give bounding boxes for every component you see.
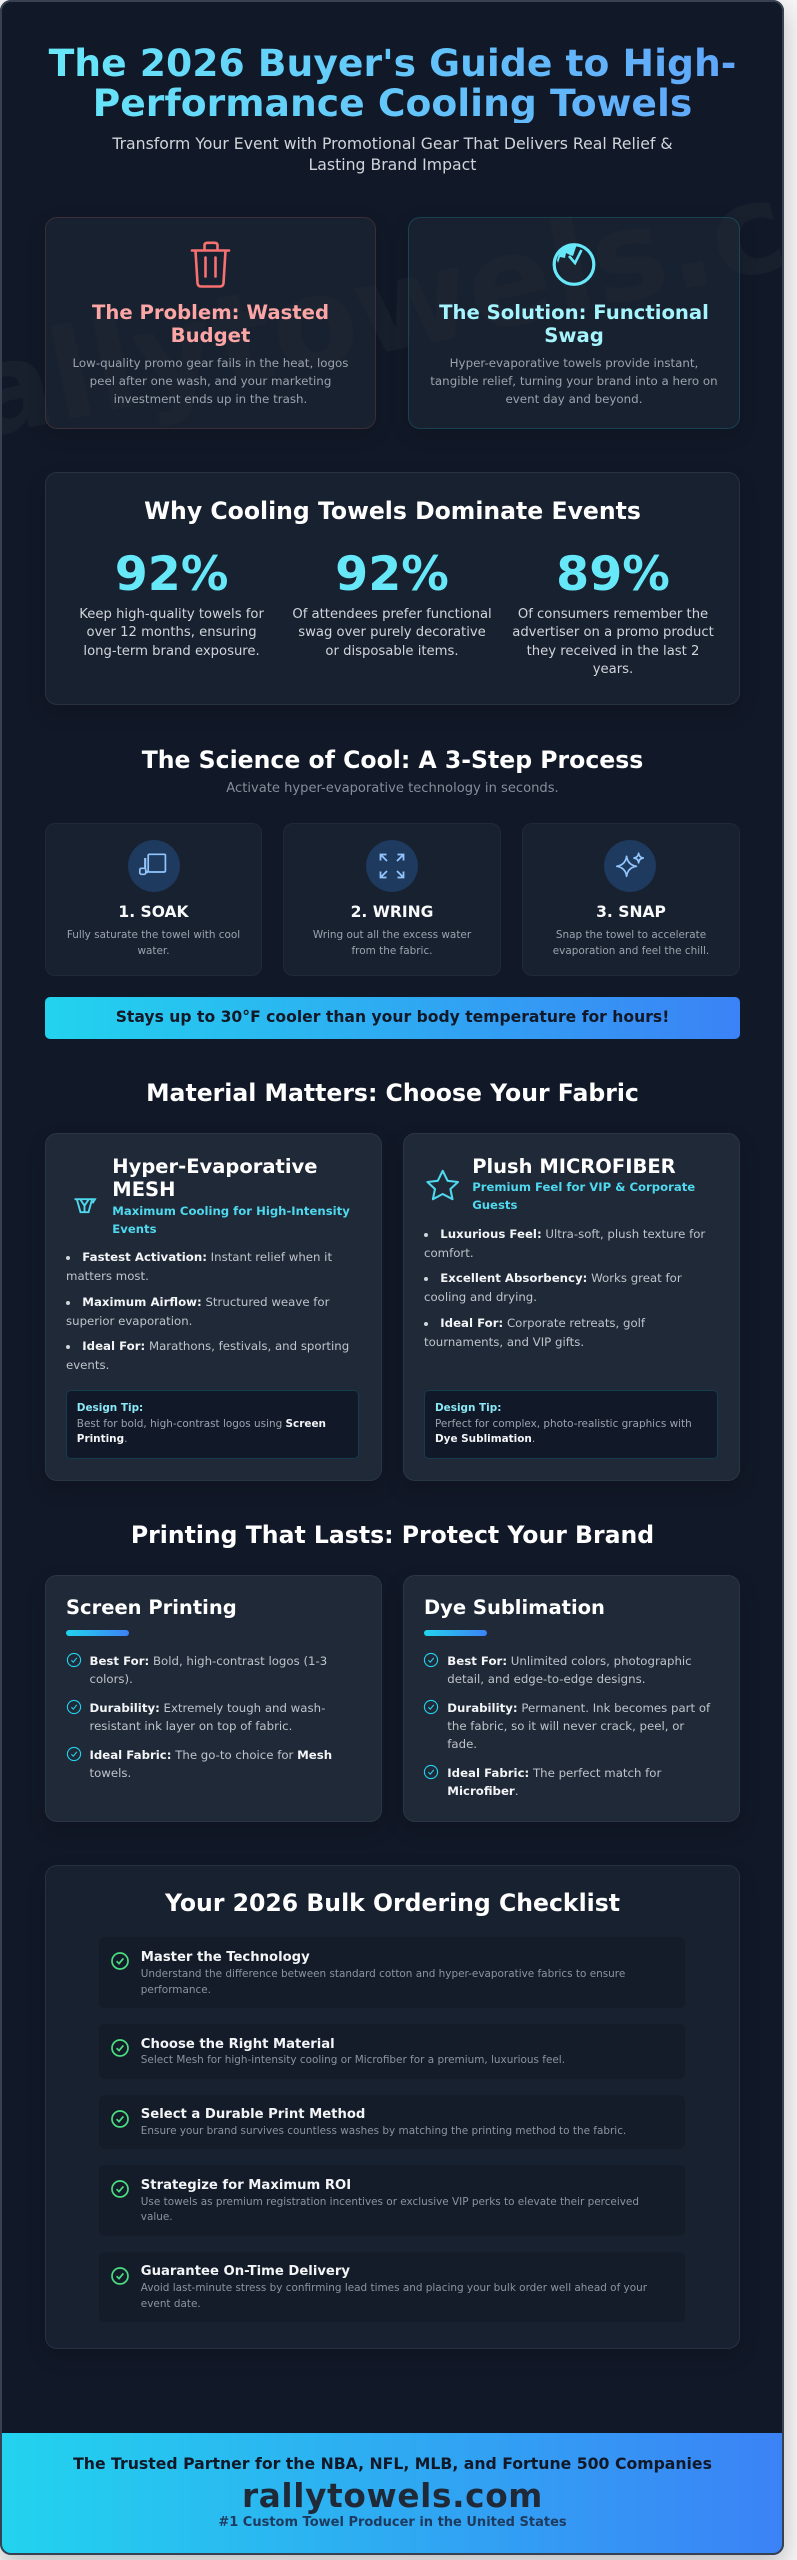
bullet: ideal for bbox=[66, 1339, 349, 1372]
step 2: wring bbox=[283, 823, 501, 976]
fabric subtitle: Guests bbox=[472, 1198, 517, 1212]
checklist item 3 bbox=[99, 2094, 685, 2149]
icon: check bbox=[111, 1952, 129, 1970]
fabric subtitle bbox=[112, 1204, 350, 1236]
heading: material matters: Material Matters: Choose Your Fabric bbox=[146, 1079, 639, 1107]
number: 89% bbox=[556, 546, 670, 602]
step title: 2. WRING bbox=[351, 903, 433, 921]
panel: mesh bbox=[45, 1133, 382, 1481]
bullet: excellent absorbency: cooling and drying. bbox=[424, 1290, 537, 1304]
item: best for: Best For: Bold, high-contrast logos (1-3 bbox=[90, 1654, 327, 1668]
bullet: ideal for: tournaments, and VIP gifts. bbox=[424, 1334, 584, 1348]
title bbox=[45, 44, 740, 123]
item: ideal fabric: towels. bbox=[90, 1766, 131, 1780]
accent bar bbox=[424, 1630, 487, 1636]
item text: Understand the difference between standard cotton and hyper-evaporative fabrics to ensure bbox=[141, 1968, 625, 1980]
item: ideal fabric: Ideal Fabric: The perfect match for bbox=[447, 1766, 661, 1780]
subtitle bbox=[112, 134, 673, 174]
heading: the solution: Swag bbox=[544, 324, 604, 347]
title: Performance Cooling Towels bbox=[93, 81, 692, 125]
stat: 89 percent remember bbox=[512, 546, 714, 677]
caption: advertiser on a promo product bbox=[512, 625, 714, 640]
icon: check bbox=[111, 2039, 129, 2057]
stat: 92 percent prefer bbox=[292, 546, 492, 659]
icon: check bbox=[111, 2180, 129, 2198]
heading: the problem bbox=[92, 301, 329, 347]
callout banner: Stays up to 30°F cooler than your body temperature for hours! bbox=[116, 1008, 669, 1026]
icon: star bbox=[426, 1170, 459, 1200]
panel: the solution bbox=[408, 217, 740, 429]
bullet: ideal for: Ideal For: Corporate retreats, golf bbox=[440, 1316, 645, 1330]
icon: mesh towel bbox=[74, 1198, 97, 1214]
fabric title: Hyper-Evaporative bbox=[112, 1155, 318, 1178]
checklist item 4 bbox=[99, 2165, 685, 2236]
caption: over 12 months, ensuring bbox=[87, 625, 257, 640]
item text bbox=[141, 2281, 647, 2312]
bullet: excellent absorbency bbox=[424, 1271, 682, 1304]
print method title: Dye Sublimation bbox=[424, 1596, 605, 1619]
item text: Ensure your brand survives countless washes by matching the printing method to the fabric. bbox=[141, 2125, 626, 2137]
callout: design tip: Printing. bbox=[77, 1433, 127, 1445]
callout: design tip: Dye Sublimation. bbox=[435, 1433, 535, 1445]
item title: Select a Durable Print Method bbox=[141, 2107, 365, 2122]
heading: science of cool: The Science of Cool: A 3-Step Process bbox=[142, 746, 643, 774]
step text bbox=[67, 929, 240, 957]
checklist item 2 bbox=[99, 2024, 685, 2079]
item title: Guarantee On-Time Delivery bbox=[141, 2264, 350, 2279]
fabric subtitle bbox=[472, 1180, 695, 1212]
item title: Choose the Right Material bbox=[141, 2037, 335, 2052]
item: best for: detail, and edge-to-edge designs. bbox=[447, 1672, 645, 1686]
heading: stats: Why Cooling Towels Dominate Events bbox=[144, 497, 641, 525]
caption: years. bbox=[593, 662, 633, 677]
item: best for: Best For: Unlimited colors, photographic bbox=[447, 1654, 692, 1668]
checklist item 5 bbox=[99, 2252, 685, 2322]
accent bar bbox=[66, 1630, 129, 1636]
item title: Master the Technology bbox=[141, 1950, 310, 1965]
callout: design tip: Design Tip: bbox=[77, 1402, 143, 1414]
bullet: ideal for: events. bbox=[66, 1358, 109, 1372]
item: ideal fabric bbox=[66, 1746, 332, 1780]
step text: evaporation and feel the chill. bbox=[553, 945, 709, 957]
panel: the problem bbox=[45, 217, 376, 429]
bullet: excellent absorbency: Excellent Absorbency: Works great for bbox=[440, 1271, 682, 1285]
bullet: fastest activation: Fastest Activation: Instant relief when it bbox=[82, 1250, 332, 1264]
icon: snap bbox=[604, 840, 656, 892]
icon: trash can bbox=[190, 242, 230, 288]
item text: value. bbox=[141, 2211, 173, 2223]
heading: the problem: Budget bbox=[171, 324, 250, 347]
icon: soak bbox=[128, 840, 180, 892]
bullet: ideal for bbox=[424, 1316, 646, 1348]
item: best for: colors). bbox=[90, 1672, 133, 1686]
caption bbox=[292, 607, 492, 659]
heading: printing that lasts: Printing That Lasts: Protect Your Brand bbox=[131, 1521, 654, 1549]
footer tagline: The Trusted Partner for the NBA, NFL, MLB, and Fortune 500 Companies bbox=[73, 2454, 712, 2472]
panel: screen printing bbox=[45, 1575, 382, 1822]
caption: long-term brand exposure. bbox=[83, 644, 260, 659]
number: 92% bbox=[115, 546, 228, 602]
step text: Snap the towel to accelerate bbox=[556, 929, 706, 941]
callout banner bbox=[45, 997, 740, 1039]
fabric subtitle: Premium Feel for VIP & Corporate bbox=[472, 1180, 695, 1194]
bullet: ideal for: Ideal For: Marathons, festivals, and sporting bbox=[82, 1339, 349, 1353]
text: problem description: Low-quality promo gear fails in the heat, logos bbox=[73, 356, 348, 370]
step text bbox=[553, 929, 709, 957]
bullet: luxurious feel: comfort. bbox=[424, 1246, 474, 1260]
icon: check bbox=[111, 2110, 129, 2128]
caption: or disposable items. bbox=[325, 644, 459, 659]
heading: the solution: The Solution: Functional bbox=[439, 301, 709, 324]
callout: design tip bbox=[66, 1390, 359, 1459]
item text: Use towels as premium registration incentives or exclusive VIP perks to elevate their perceived bbox=[141, 2196, 639, 2208]
panel: microfiber bbox=[403, 1133, 740, 1481]
callout: design tip: Best for bold, high-contrast logos using Screen bbox=[77, 1418, 326, 1430]
panel: dye sublimation bbox=[403, 1575, 740, 1822]
bullet: maximum airflow: superior evaporation. bbox=[66, 1314, 192, 1328]
icon: check bbox=[111, 2267, 129, 2285]
fabric subtitle: Maximum Cooling for High-Intensity bbox=[112, 1204, 350, 1218]
caption: Keep high-quality towels for bbox=[79, 607, 264, 622]
bullet: luxurious feel bbox=[424, 1227, 706, 1260]
subtitle: Lasting Brand Impact bbox=[309, 154, 476, 174]
item text: performance. bbox=[141, 1984, 211, 1996]
callout: design tip: Design Tip: bbox=[435, 1402, 501, 1414]
caption: Of consumers remember the bbox=[518, 607, 708, 622]
bullet: fastest activation: matters most. bbox=[66, 1269, 149, 1283]
fabric subtitle: Events bbox=[112, 1222, 157, 1236]
step 3: snap bbox=[522, 823, 740, 976]
item: durability bbox=[66, 1700, 325, 1733]
text: solution description: tangible relief, turning your brand into a hero on bbox=[430, 374, 718, 388]
bullet: luxurious feel: Luxurious Feel: Ultra-soft, plush texture for bbox=[440, 1227, 705, 1241]
step text: water. bbox=[137, 945, 170, 957]
fabric title: MESH bbox=[112, 1178, 175, 1201]
step text: from the fabric. bbox=[352, 945, 432, 957]
item: durability: Durability: Permanent. Ink becomes part of bbox=[447, 1701, 710, 1715]
panel: why cooling towels dominate bbox=[45, 472, 740, 705]
item: durability: the fabric, so it will never crack, peel, or bbox=[447, 1719, 684, 1733]
callout: design tip bbox=[424, 1390, 718, 1459]
item: durability bbox=[424, 1700, 710, 1751]
caption bbox=[79, 607, 264, 659]
bullet: maximum airflow: Maximum Airflow: Structured weave for bbox=[82, 1295, 329, 1309]
title: The 2026 Buyer's Guide to High- bbox=[49, 41, 736, 85]
item: best for bbox=[424, 1652, 692, 1686]
item: durability: resistant ink layer on top of fabric. bbox=[90, 1719, 292, 1733]
caption: swag over purely decorative bbox=[298, 625, 486, 640]
item text bbox=[141, 2196, 639, 2223]
step text: Fully saturate the towel with cool bbox=[67, 929, 240, 941]
heading: checklist: Your 2026 Bulk Ordering Checklist bbox=[165, 1889, 620, 1917]
item text: event date. bbox=[141, 2298, 201, 2310]
callout: design tip: Perfect for complex, photo-realistic graphics with bbox=[435, 1418, 692, 1430]
footer bbox=[0, 2432, 784, 2555]
text: solution description bbox=[430, 356, 718, 406]
checklist item 1 bbox=[99, 1937, 685, 2008]
item text bbox=[141, 1968, 625, 1996]
text: problem description: investment ends up in the trash. bbox=[114, 392, 307, 406]
step text bbox=[313, 929, 472, 957]
item: ideal fabric: Ideal Fabric: The go-to choice for Mesh bbox=[90, 1748, 332, 1762]
number: 92% bbox=[335, 546, 449, 602]
text: solution description: event day and beyond. bbox=[506, 392, 642, 406]
item: best for bbox=[66, 1652, 327, 1686]
item text: Select Mesh for high-intensity cooling or Microfiber for a premium, luxurious feel. bbox=[141, 2054, 565, 2066]
caption: Of attendees prefer functional bbox=[292, 607, 492, 622]
item: durability: fade. bbox=[447, 1737, 477, 1751]
text: problem description bbox=[73, 356, 348, 406]
item: ideal fabric bbox=[424, 1764, 662, 1798]
footer note: #1 Custom Towel Producer in the United States bbox=[218, 2515, 567, 2530]
item text: Avoid last-minute stress by confirming lead times and placing your bulk order well ahead of your bbox=[141, 2282, 647, 2294]
heading: the problem: The Problem: Wasted bbox=[92, 301, 329, 324]
print method title: Screen Printing bbox=[66, 1596, 237, 1619]
heading: the solution bbox=[439, 301, 709, 347]
caption bbox=[512, 607, 714, 677]
bullet: maximum airflow bbox=[66, 1295, 330, 1328]
text: problem description: peel after one wash, and your marketing bbox=[90, 374, 331, 388]
step title: 1. SOAK bbox=[118, 903, 189, 921]
item: ideal fabric: Microfiber. bbox=[447, 1784, 518, 1798]
footer brand: rallytowels.com bbox=[242, 2477, 543, 2515]
step text: Wring out all the excess water bbox=[313, 929, 471, 941]
icon: wring bbox=[366, 840, 418, 892]
item title: Strategize for Maximum ROI bbox=[141, 2178, 351, 2193]
stat: 92 percent keep bbox=[79, 546, 264, 659]
text: solution description: Hyper-evaporative towels provide instant, bbox=[450, 356, 698, 370]
step title: 3. SNAP bbox=[596, 903, 666, 921]
fabric title bbox=[112, 1155, 318, 1201]
panel: bulk ordering checklist bbox=[45, 1864, 740, 2348]
caption: they received in the last 2 bbox=[527, 644, 699, 659]
fabric title: Plush MICROFIBER bbox=[472, 1155, 676, 1178]
step 1: soak bbox=[45, 823, 262, 976]
subheading: science of cool: Activate hyper-evaporative technology in seconds. bbox=[226, 780, 559, 796]
icon: cooling orb bbox=[552, 243, 596, 286]
subtitle: Transform Your Event with Promotional Gear That Delivers Real Relief & bbox=[112, 134, 673, 152]
item: durability: Durability: Extremely tough and wash- bbox=[90, 1701, 325, 1715]
bullet: fastest activation bbox=[66, 1250, 332, 1283]
